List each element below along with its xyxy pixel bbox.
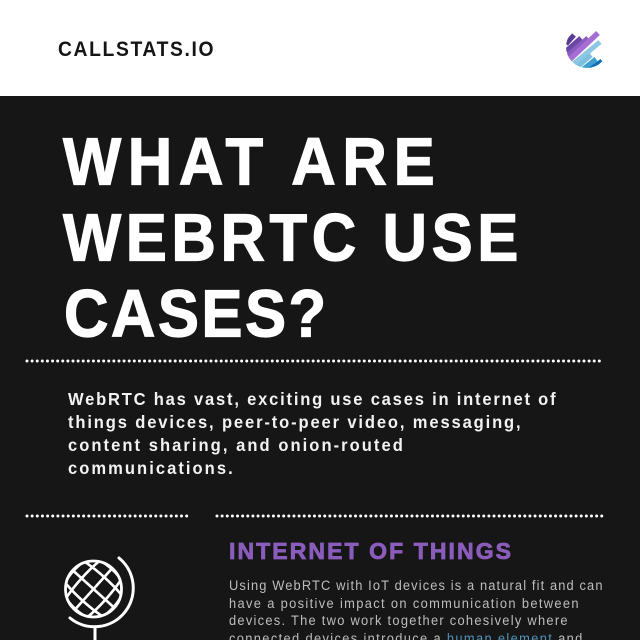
intro text: WebRTC has vast, exciting use cases in internet of xyxy=(68,388,556,409)
header band xyxy=(0,0,640,96)
dotted divider left xyxy=(27,514,187,518)
dotted divider right xyxy=(217,514,602,518)
intro text: things devices, peer-to-peer video, messaging, xyxy=(68,411,521,432)
icon: callstats logo xyxy=(566,33,602,72)
brand name: CALLSTATS.IO xyxy=(58,38,213,61)
intro text: content sharing, and onion-routed xyxy=(68,434,403,455)
dotted divider xyxy=(27,360,602,362)
title xyxy=(63,124,518,351)
section body text: have a positive impact on communication between xyxy=(229,596,579,611)
intro text xyxy=(68,388,556,478)
section heading: internet of things: INTERNET OF THINGS xyxy=(229,538,511,564)
section body text: devices. The two work together cohesively where xyxy=(229,613,568,628)
section body text: Using WebRTC with IoT devices is a natural fit and can xyxy=(229,578,603,593)
title: CASES? xyxy=(64,276,326,351)
intro text: communications. xyxy=(68,457,233,478)
title: WEBRTC USE xyxy=(63,200,518,275)
icon: globe on stand xyxy=(64,556,135,640)
section body text xyxy=(229,578,603,640)
title: WHAT ARE xyxy=(63,124,435,199)
